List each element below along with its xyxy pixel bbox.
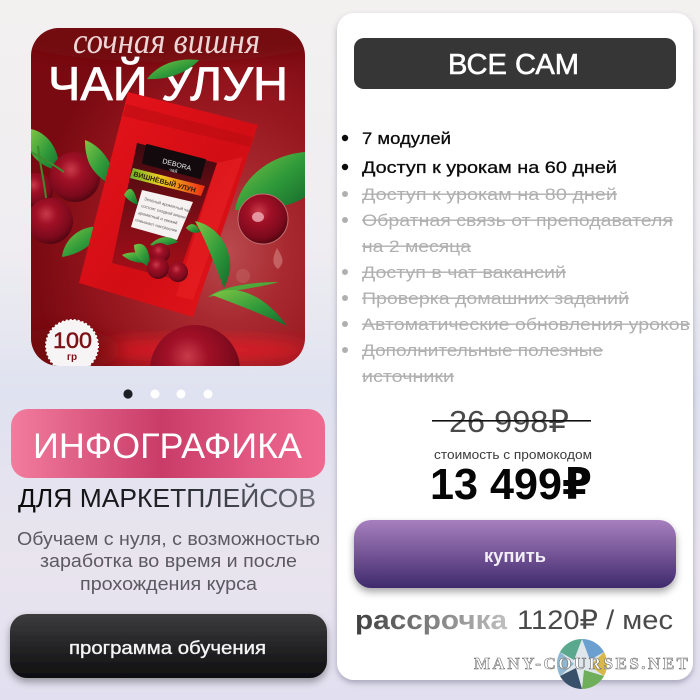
- icon: leaf upper left: [85, 140, 110, 182]
- carousel dots: [123, 389, 212, 399]
- button: buy: купить: [484, 546, 546, 566]
- banner: infographics: [11, 409, 325, 478]
- icon: bottom cherry: [150, 325, 240, 366]
- icon: watermark globe: [557, 639, 607, 689]
- bag window: [112, 143, 217, 280]
- list: excluded items: [342, 185, 690, 386]
- bag white label: [131, 190, 193, 240]
- bag white label: состоит сладкой вишни: [141, 203, 187, 220]
- panel: product image: [31, 28, 305, 366]
- badge: 100 gr: [46, 320, 98, 372]
- button: buy: [354, 520, 676, 588]
- heading: plan name: [354, 38, 676, 89]
- bag white label: повышает настроение: [135, 217, 179, 233]
- icon: left cherry cluster: [31, 129, 100, 244]
- text block: description: заработка во время и после: [40, 551, 297, 571]
- bag flavour strip: ВИШНЁВЫЙ УЛУН: [132, 169, 197, 195]
- icon: large right leaf: [235, 152, 305, 210]
- product bag: [79, 92, 258, 317]
- icon: bottom right sprig: [208, 282, 287, 326]
- button: course programme: [10, 614, 327, 678]
- icon: leaf over bag: [195, 221, 230, 288]
- badge: 100 gr: гр: [67, 352, 77, 363]
- list: included items: [342, 129, 617, 177]
- instalment price: рассрочка: [355, 605, 508, 635]
- watermark text: MANY-COURSES.NET: [474, 654, 689, 673]
- list: included items: Доступ к урокам на 60 дней: [362, 158, 617, 177]
- icon: leaf lower left: [62, 226, 94, 257]
- bag white label: Зелёный ароматный чай: [144, 196, 192, 214]
- heading: script tagline: сочная вишня: [73, 21, 260, 61]
- list: excluded items: на 2 месяца: [362, 237, 472, 256]
- panel: pricing card: [337, 13, 693, 680]
- list: excluded items: Доступ к урокам на 80 дней: [362, 185, 617, 204]
- heading: plan name: ВСЕ САМ: [448, 49, 579, 81]
- list: excluded items: источники: [362, 367, 454, 386]
- watermark: [474, 639, 689, 689]
- bag brand label: DEBORA: [161, 158, 192, 173]
- list: excluded items: Доступ в чат вакансий: [362, 263, 566, 282]
- list: excluded items: Автоматические обновления уроков: [362, 315, 690, 334]
- heading: for marketplaces: ДЛЯ МАРКЕТПЛЕЙСОВ: [18, 483, 316, 513]
- heading: product name: ЧАЙ УЛУН: [48, 57, 288, 110]
- icon: top leaf: [147, 60, 199, 79]
- text block: description: [17, 529, 320, 594]
- text block: description: прохождения курса: [80, 574, 258, 594]
- instalment price: [355, 605, 673, 635]
- badge: 100 gr: 100: [53, 328, 92, 353]
- list: included items: 7 модулей: [362, 129, 451, 148]
- instalment price: 1120₽ / мес: [517, 605, 673, 635]
- bag mini leaves and cherries: [122, 189, 200, 282]
- list: excluded items: Обратная связь от преподавателя: [362, 211, 673, 230]
- old price: 26 998₽: [449, 404, 569, 439]
- bag white label: ароматный и свежий: [138, 210, 179, 226]
- list: excluded items: Дополнительные полезные: [362, 341, 603, 360]
- icon: right cherry: [238, 194, 288, 244]
- bag brand label: чай: [168, 166, 178, 175]
- button: course programme: программа обучения: [69, 638, 266, 658]
- banner: infographics: ИНФОГРАФИКА: [33, 427, 303, 466]
- icon: water drops: [236, 248, 282, 283]
- bag brand label: [143, 145, 205, 178]
- list: excluded items: Проверка домашних заданий: [362, 289, 629, 308]
- promo price caption: стоимость с промокодом: [434, 447, 592, 462]
- promo price: 13 499₽: [430, 460, 592, 509]
- text block: description: Обучаем с нуля, с возможностью: [17, 529, 320, 549]
